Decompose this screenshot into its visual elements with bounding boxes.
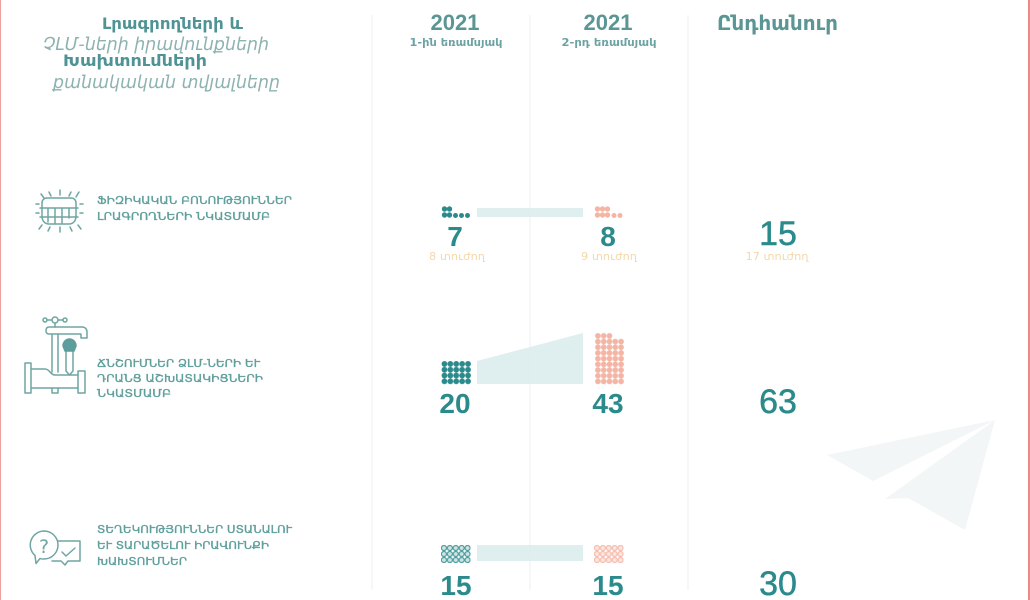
row 3 label: ՏԵՂԵԿՈՒԹՅՈՒՆՆԵՐ ՍՏԱՆԱԼՈՒ — [97, 523, 292, 536]
column header: 2021 first quarter: 2021 — [431, 10, 479, 35]
row 2 value: quarter 1: 20 — [439, 388, 471, 419]
row 3 dots: quarter 1 — [441, 545, 470, 563]
row 1 total — [746, 215, 810, 263]
page border: left — [0, 0, 1, 600]
icon: fist with rays — [36, 190, 83, 232]
row 3 dots: quarter 2 — [594, 545, 624, 563]
row 2 total: 63 — [759, 383, 797, 421]
icon: pipe and microphone — [25, 317, 87, 393]
row 1 total: 17 տուժող — [746, 250, 810, 263]
row 2 connector band — [477, 333, 583, 384]
row 1 value: quarter 2: 9 տուժող — [581, 250, 638, 263]
row 3 label: ԽԱԽՏՈՒՄՆԵՐ — [97, 555, 187, 568]
column header: 2021 second quarter: 2021 — [584, 10, 632, 35]
row 1 label: ՖԻԶԻԿԱԿԱՆ ԲՈՆՈՒԹՅՈՒՆՆԵՐ — [97, 194, 292, 207]
row 2 value: quarter 2: 43 — [592, 388, 624, 419]
row 1 label: ԼՐԱԳՐՈՂՆԵՐԻ ՆԿԱՏՄԱՄԲ — [97, 210, 270, 223]
row 2 dots: quarter 2 — [595, 333, 624, 384]
row 2 label — [97, 357, 263, 400]
column header: 2021 second quarter: 2-րդ եռամսյակ — [562, 36, 656, 49]
title — [43, 14, 280, 93]
row 1 value: quarter 1 — [429, 221, 486, 263]
row 2 label: ՃՆՇՈՒՄՆԵՐ ՁԼՄ-ՆԵՐԻ ԵՒ — [97, 357, 260, 370]
title: ՉԼՄ-ների իրավունքների — [43, 34, 269, 55]
icon: speech bubbles — [30, 531, 80, 565]
row 3 label: ԵՒ ՏԱՐԱԾԵԼՈՒ ԻՐԱՎՈՒՆՔԻ — [97, 539, 269, 552]
row 1 value: quarter 2 — [581, 221, 638, 263]
column header: 2021 second quarter — [562, 10, 656, 49]
row 1 value: quarter 1: 8 տուժող — [429, 250, 486, 263]
row 3 label — [97, 523, 292, 568]
row 1 dots: quarter 2 — [595, 206, 622, 218]
column header: total: Ընդհանուր — [717, 11, 838, 35]
row 1 value: quarter 2: 8 — [600, 221, 616, 252]
title: Խախտումների — [63, 51, 207, 70]
column header: 2021 first quarter — [410, 10, 502, 49]
icon: speech bubbles: ? — [39, 536, 49, 558]
row 2 label: ԴՐԱՆՑ ԱՇԽԱՏԱԿԻՑՆԵՐԻ — [97, 372, 263, 385]
page border: right — [1028, 0, 1030, 600]
column dividers — [372, 15, 688, 590]
title: քանակական տվյալները — [51, 72, 280, 93]
paper plane watermark — [827, 420, 995, 530]
row 1 connector band — [477, 208, 583, 217]
row 1 dots: quarter 1 — [442, 206, 470, 218]
row 2 label: ՆԿԱՏՄԱՄԲ — [97, 387, 171, 400]
row 2 dots: quarter 1 — [442, 361, 471, 384]
column header: 2021 first quarter: 1-ին եռամսյակ — [410, 36, 502, 49]
row 1 value: quarter 1: 7 — [447, 221, 463, 252]
title: Լրագրողների և — [102, 14, 243, 33]
row 1 total: 15 — [759, 215, 797, 253]
row 3 connector band — [477, 545, 583, 561]
row 1 label — [97, 194, 292, 223]
